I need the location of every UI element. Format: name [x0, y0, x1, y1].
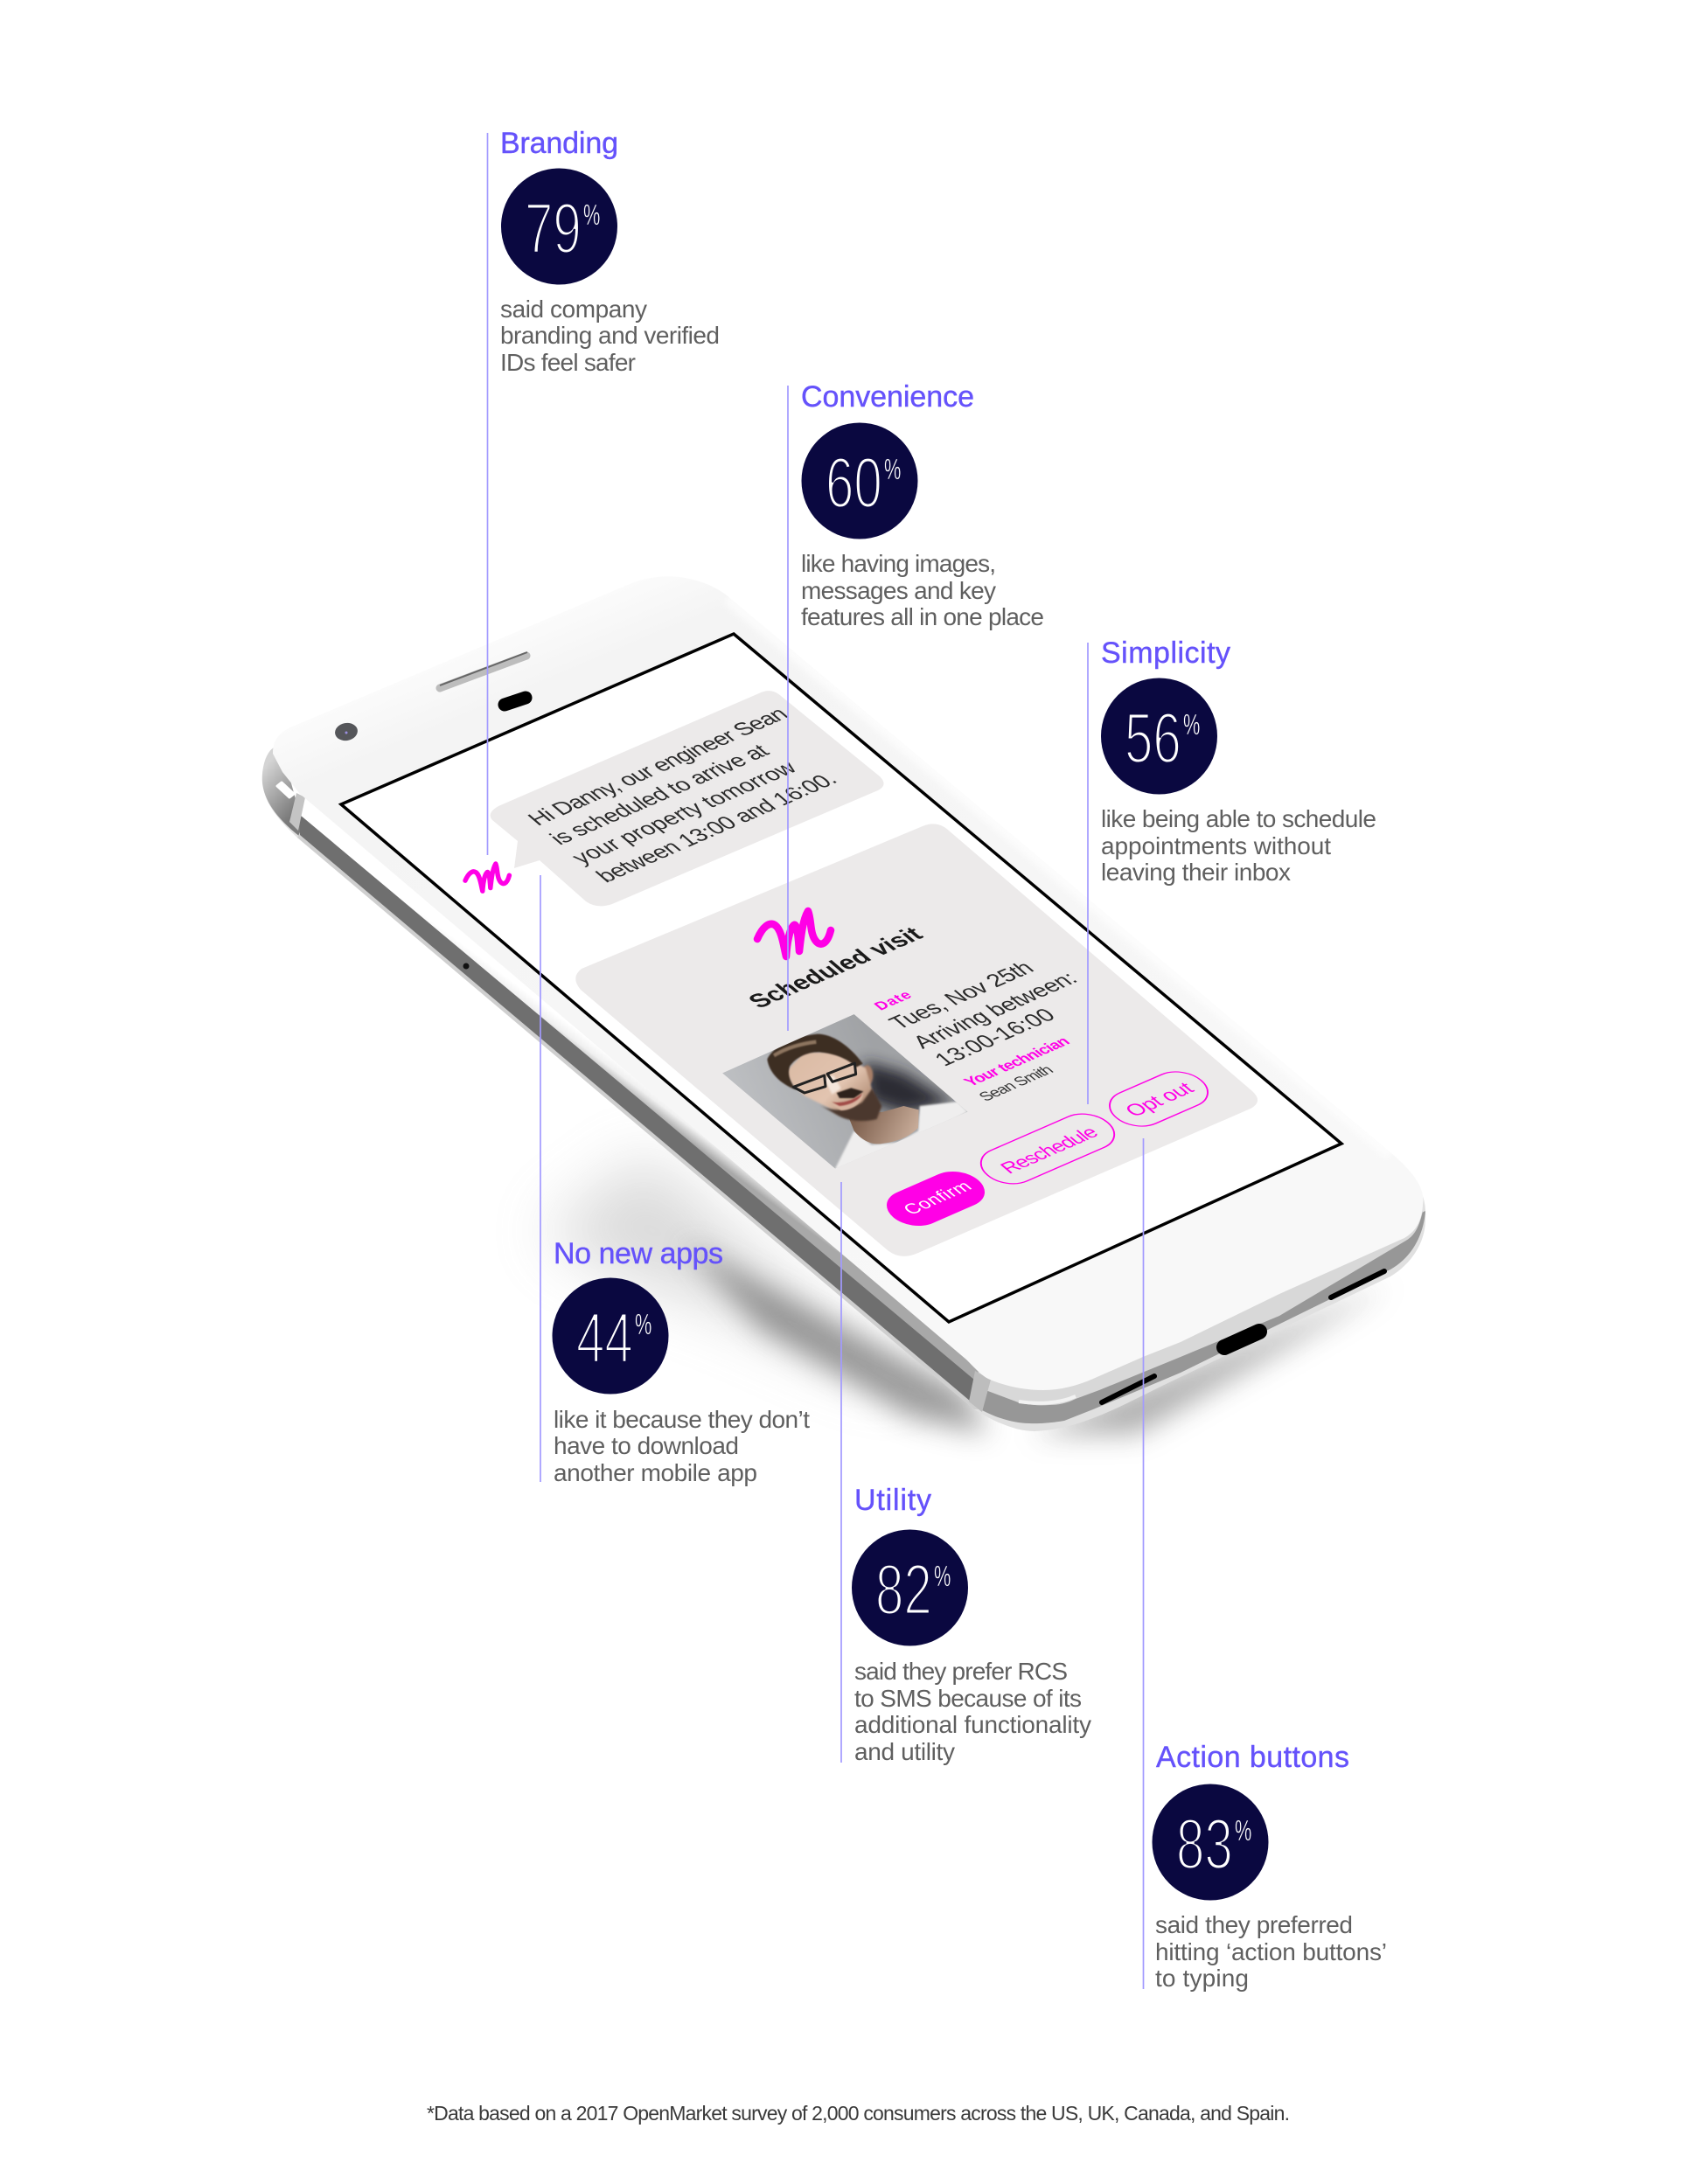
description: branding and verified	[500, 322, 720, 349]
heading: No new apps	[554, 1237, 723, 1270]
leader line: action buttons	[1142, 1138, 1144, 1989]
date details: Arriving between:	[907, 967, 1083, 1053]
stat circle 44%	[553, 1278, 668, 1394]
phone screen	[341, 634, 1341, 1322]
moustache shadow	[837, 1088, 863, 1098]
bevel highlight	[1019, 1396, 1076, 1403]
mouth	[832, 1094, 862, 1106]
neck	[848, 1106, 919, 1144]
phone bottom gray band	[962, 1211, 1425, 1423]
stat: no new apps	[553, 1237, 810, 1486]
leader line: no new apps	[540, 875, 541, 1482]
heading: Utility	[854, 1484, 931, 1517]
heading: Simplicity	[1101, 636, 1230, 670]
card heading: Scheduled visit	[742, 922, 928, 1012]
footnote: *Data based on a 2017 OpenMarket survey of 2,000 consumers across the US, UK, Canada, and Spain.	[427, 2102, 1290, 2125]
phone bottom light bevel	[962, 1211, 1423, 1405]
bottom port: left speaker	[1102, 1376, 1154, 1402]
ear	[861, 1065, 873, 1086]
message text: Hi Danny, our engineer Sean	[522, 703, 793, 830]
description	[801, 550, 1044, 630]
description: to typing	[1155, 1965, 1249, 1992]
phone shadow	[542, 1154, 1390, 1434]
shirt	[835, 1102, 968, 1172]
leader line: convenience	[787, 386, 789, 1031]
stat circle 56%: %	[1183, 708, 1200, 741]
stat circle 79%	[501, 168, 617, 285]
hair	[767, 1034, 863, 1090]
confirm button: Confirm	[899, 1179, 976, 1218]
stat circle 79%: %	[583, 198, 600, 231]
infographic canvas	[262, 131, 1425, 2125]
reschedule button	[970, 1107, 1125, 1191]
nose highlight	[824, 1075, 841, 1095]
message text	[522, 703, 842, 887]
reschedule button: Reschedule	[995, 1123, 1103, 1177]
description: like it because they don’t	[554, 1406, 810, 1433]
description: features all in one place	[801, 603, 1044, 630]
description: said company	[500, 296, 647, 323]
scheduled visit card	[575, 824, 1258, 1256]
small M logo	[465, 864, 509, 891]
description: IDs feel safer	[500, 349, 636, 376]
large M logo	[757, 911, 831, 956]
phone left edge corner	[262, 748, 306, 837]
date details: 13:00-16:00	[929, 1004, 1061, 1070]
description: like having images,	[801, 550, 996, 577]
stat circle 56%: 56	[1125, 699, 1181, 778]
description: have to download	[554, 1432, 739, 1459]
chin	[836, 1093, 863, 1111]
stat circle 44%: %	[635, 1308, 651, 1340]
stat circle 83%: %	[1235, 1814, 1251, 1847]
leader line: branding	[486, 133, 488, 855]
description: to SMS because of its	[854, 1685, 1082, 1712]
front camera	[333, 721, 359, 742]
date label: Date	[871, 988, 916, 1013]
opt out button: Opt out	[1120, 1079, 1200, 1121]
stat: branding	[500, 127, 720, 376]
wall shadow	[863, 1061, 953, 1113]
antenna band upper	[289, 793, 305, 831]
phone metal body	[262, 591, 1425, 1431]
leader line: utility	[840, 1182, 842, 1763]
stat circle 79%: 79	[525, 189, 582, 268]
stat circle 82%	[852, 1530, 968, 1645]
description	[500, 296, 720, 376]
opt out button	[1098, 1065, 1219, 1133]
bottom port: right speaker	[1331, 1271, 1384, 1297]
proximity sensor	[505, 698, 526, 705]
leader line: simplicity	[1087, 643, 1089, 1104]
stat circle 44%: 44	[576, 1298, 633, 1378]
volume button hole	[463, 963, 469, 969]
date details: Tues, Nov 25th	[883, 956, 1039, 1033]
description	[854, 1658, 1091, 1765]
phone left side dark band	[300, 813, 974, 1402]
description: hitting ‘action buttons’	[1155, 1938, 1387, 1965]
description: additional functionality	[854, 1711, 1091, 1738]
right edge glow	[728, 598, 1390, 1154]
heading: Convenience	[801, 380, 974, 414]
earpiece speaker	[440, 652, 527, 688]
antenna band lower	[969, 1371, 991, 1412]
message text: your property tomorrow	[566, 756, 802, 868]
description: leaving their inbox	[1101, 859, 1291, 886]
phone	[262, 576, 1425, 1431]
phone left side light rim	[297, 832, 983, 1409]
description: like being able to schedule	[1101, 805, 1376, 832]
stat circle 82%: 82	[875, 1550, 932, 1630]
stat circle 60%	[801, 423, 918, 539]
confirm button	[875, 1165, 996, 1233]
description: and utility	[854, 1738, 955, 1765]
side highlight	[277, 782, 294, 797]
stat circle 60%: 60	[826, 443, 882, 523]
stat circle 60%: %	[884, 453, 901, 485]
stat: utility	[852, 1484, 1091, 1765]
description	[1155, 1911, 1387, 1992]
face	[789, 1052, 873, 1110]
description	[1101, 805, 1376, 886]
heading: Action buttons	[1156, 1741, 1349, 1774]
phone left bevel	[289, 774, 981, 1387]
stat: action buttons	[1153, 1741, 1387, 1992]
description: appointments without	[1101, 832, 1331, 859]
description: messages and key	[801, 577, 996, 604]
stat circle 83%	[1153, 1784, 1268, 1901]
message bubble	[491, 691, 884, 906]
technician label: Your technician	[960, 1034, 1074, 1089]
beard	[819, 1089, 881, 1121]
description: said they prefer RCS	[854, 1658, 1068, 1685]
message text: is scheduled to arrive at	[544, 740, 775, 849]
bottom port: charging	[1224, 1332, 1259, 1347]
stat circle 83%: 83	[1176, 1805, 1233, 1884]
stat circle 56%	[1101, 678, 1217, 794]
date details	[883, 956, 1083, 1070]
hair streaks	[774, 1042, 816, 1055]
technician portrait	[722, 1014, 968, 1172]
description	[554, 1406, 810, 1486]
stat: simplicity	[1101, 636, 1376, 886]
stat: convenience	[801, 380, 1044, 630]
stat circle 82%: %	[934, 1560, 951, 1592]
technician name: Sean Smith	[975, 1062, 1057, 1104]
heading: Branding	[500, 127, 618, 160]
message text: between 13:00 and 16:00.	[590, 768, 842, 887]
phone front face	[273, 576, 1423, 1390]
glasses	[793, 1063, 856, 1093]
description: another mobile app	[554, 1459, 757, 1486]
description: said they preferred	[1155, 1911, 1353, 1938]
